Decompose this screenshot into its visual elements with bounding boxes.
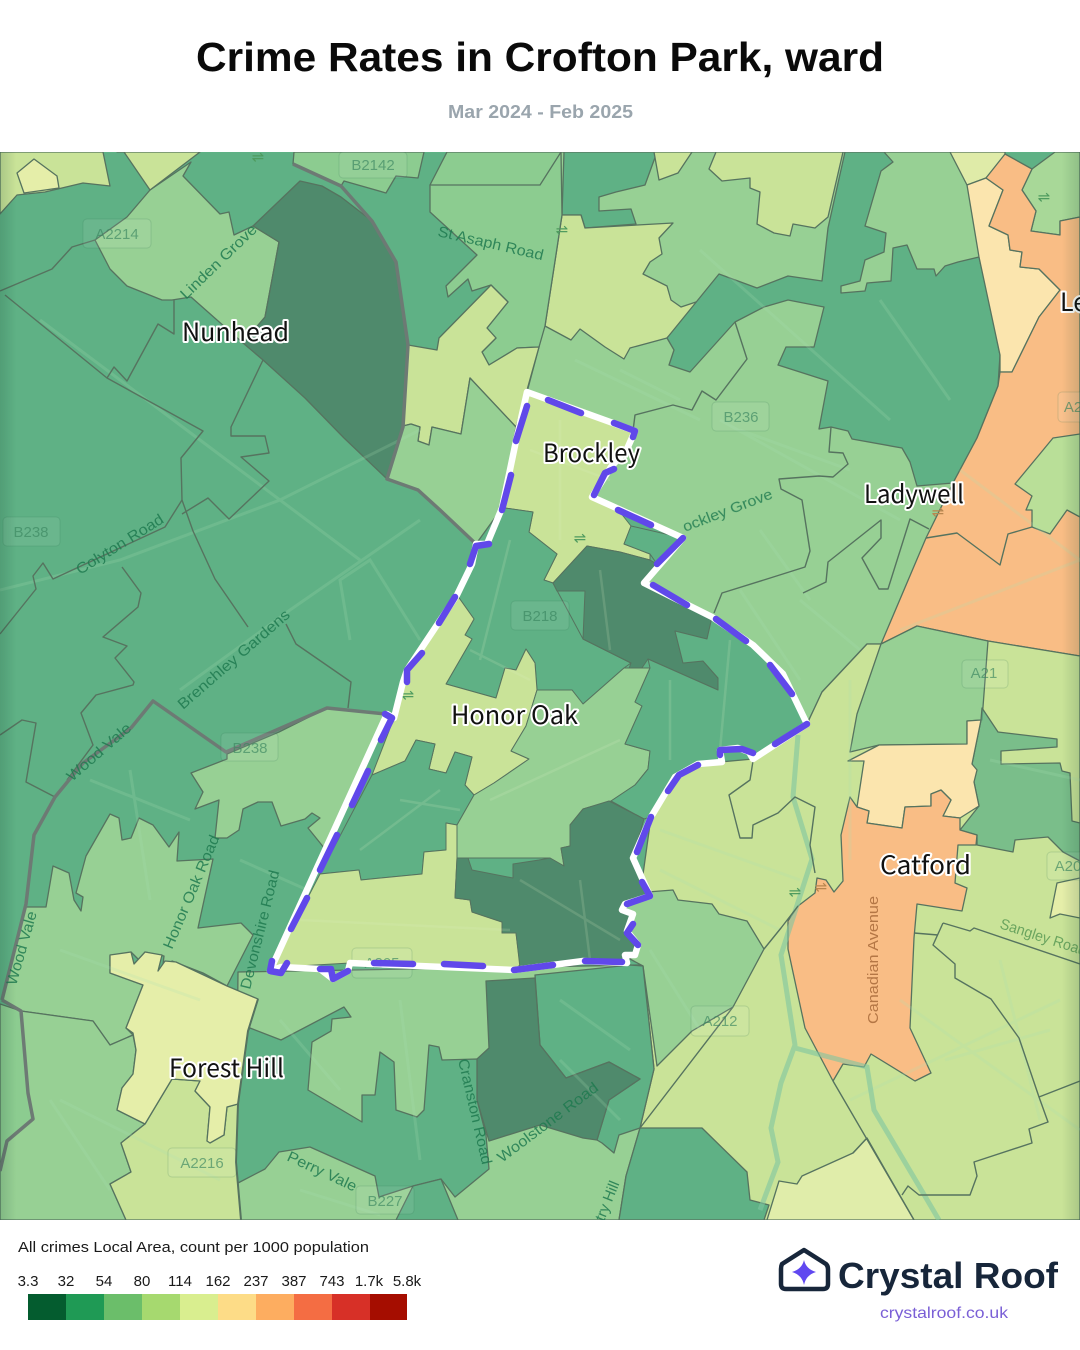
road number shields: B238 [232, 740, 268, 757]
road name labels: Colyton Road [73, 511, 167, 578]
road name labels: ockley Grove [680, 486, 775, 536]
road name labels: Cranston Road [454, 1057, 495, 1166]
legend scale labels: 743 [319, 1273, 345, 1290]
road number shields: A205 [364, 955, 400, 972]
legend scale labels: 32 [58, 1273, 74, 1290]
legend scale labels: 54 [96, 1273, 112, 1290]
place name labels: Catford [880, 846, 971, 882]
website url: crystalroof.co.uk [880, 1305, 1009, 1322]
railway station icons: ⇌ [1038, 188, 1051, 206]
map edge vignette [0, 152, 1080, 1220]
place name labels: Brockley [543, 434, 640, 470]
road number shields: A21 [971, 665, 997, 682]
road number shields: B227 [367, 1193, 403, 1210]
borough boundary lines [0, 164, 476, 1171]
road name labels: Brenchley Gardens [174, 606, 294, 713]
thin neighbourhood boundary lines [0, 240, 1080, 1220]
road name labels: Honor Oak Road [160, 833, 223, 952]
surrounding neighbourhood areas [0, 152, 1080, 1220]
legend scale labels: 3.3 [18, 1273, 38, 1290]
faint road texture lines [0, 250, 1080, 1215]
road name labels: Wood Vale [63, 720, 135, 785]
road number shields: B2142 [351, 157, 395, 174]
road number shields: A2214 [95, 226, 139, 243]
road name labels: St Asaph Road [436, 223, 545, 264]
icon: house with star [781, 1250, 828, 1289]
road number shields: B218 [522, 608, 558, 625]
legend scale labels: 1.7k [355, 1273, 384, 1290]
road name labels: Linden Grove [177, 221, 261, 303]
railway station icons [252, 148, 1051, 901]
road name labels: Woolstone Road [494, 1079, 602, 1166]
legend scale labels: 80 [134, 1273, 150, 1290]
legend scale labels: 162 [205, 1273, 231, 1290]
road number shields [3, 152, 1080, 1214]
legend scale labels: 114 [168, 1273, 192, 1290]
railway station icons: ⇌ [932, 503, 945, 521]
road number shields: B236 [723, 409, 759, 426]
railway station icons: ⇌ [574, 529, 587, 547]
legend scale labels: 237 [243, 1273, 269, 1290]
place name labels: Forest Hill [169, 1049, 284, 1085]
railway station icons: ⇌ [556, 221, 569, 239]
legend [18, 1239, 422, 1320]
road name labels: Perry Vale [284, 1148, 359, 1195]
place name labels: Nunhead [182, 313, 289, 349]
ward boundary: white and purple dashed [270, 392, 807, 979]
railway station icons: ⇌ [789, 883, 802, 901]
road number shields: B238 [13, 524, 49, 541]
railway station icons: ⇌ [402, 686, 415, 704]
road name labels: try Hill [592, 1178, 623, 1223]
logo: Crystal Roof [781, 1250, 1059, 1322]
road name labels [4, 221, 1080, 1223]
legend scale labels: 5.8k [393, 1273, 422, 1290]
legend scale labels: 387 [281, 1273, 307, 1290]
road name labels: Wood Vale [4, 909, 41, 987]
railway station icons: ⇌ [815, 878, 828, 896]
road number shields: A2216 [180, 1155, 224, 1172]
road name labels: Devonshire Road [237, 868, 283, 991]
ward neighbourhood areas [276, 396, 718, 967]
legend scale labels [18, 1273, 422, 1290]
title: Crime Rates in Crofton Park, ward [196, 34, 884, 80]
subtitle: date range: Mar 2024 - Feb 2025 [448, 102, 633, 122]
place name labels: Honor Oak [451, 696, 578, 732]
railway station icons: ⇌ [252, 148, 265, 166]
road lines inside ward [360, 478, 731, 958]
place name labels [169, 283, 1080, 1085]
legend title: All crimes Local Area, count per 1000 population [18, 1239, 369, 1256]
choropleth map [0, 148, 1080, 1223]
legend colour swatches [28, 1294, 407, 1320]
road number shields: A212 [702, 1013, 738, 1030]
logo wordmark: Crystal Roof [838, 1255, 1059, 1296]
river [760, 735, 939, 1220]
road name labels: Canadian Avenue [865, 896, 882, 1024]
place name labels: Ladywell [864, 475, 964, 511]
